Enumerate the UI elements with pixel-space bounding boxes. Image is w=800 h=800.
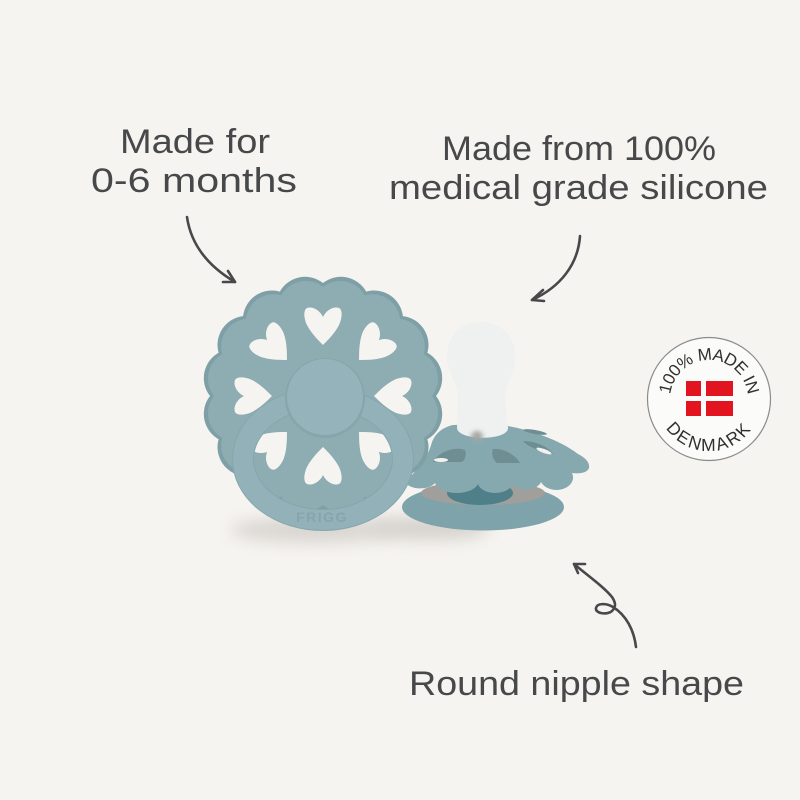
ring brand mark: FRIGG: [296, 509, 348, 525]
side stalk: [447, 481, 513, 505]
pacifier: front view: [204, 277, 442, 525]
centre button: [285, 358, 365, 438]
badge: 100% made in Denmark: [646, 336, 772, 462]
text: round nipple shape: Round nipple shape: [409, 665, 744, 703]
ring handle: [243, 398, 403, 520]
badge text: 100% MADE IN: [660, 348, 760, 394]
text: made from 100% medical grade silicone: medical grade silicone: [389, 169, 768, 207]
text: made for 0-6 months: 0-6 months: [91, 162, 297, 200]
side flange: [405, 425, 589, 493]
side ring: [402, 484, 564, 530]
icon: Danish flag: [686, 381, 733, 416]
text: made for 0-6 months: [91, 123, 297, 200]
flange scallop edge: [204, 277, 442, 515]
arrow: to nipple: [532, 236, 580, 301]
text: made for 0-6 months: Made for: [120, 123, 270, 161]
heart cut-outs: [234, 307, 412, 485]
arrow: to front of pacifier: [187, 217, 235, 282]
text: made from 100% medical grade silicone: Made from 100%: [442, 130, 716, 168]
shadow under pacifiers: [230, 516, 490, 543]
nipple: [447, 322, 515, 438]
pacifier: side view: [402, 322, 589, 530]
text: made from 100% medical grade silicone: [389, 130, 768, 207]
side ring inner shadow: [421, 481, 545, 505]
badge: 100% made in Denmark: DENMARK: [666, 421, 751, 451]
nipple base shadow: [471, 431, 483, 441]
arrow: loop arrow to nipple shape: [574, 564, 636, 647]
